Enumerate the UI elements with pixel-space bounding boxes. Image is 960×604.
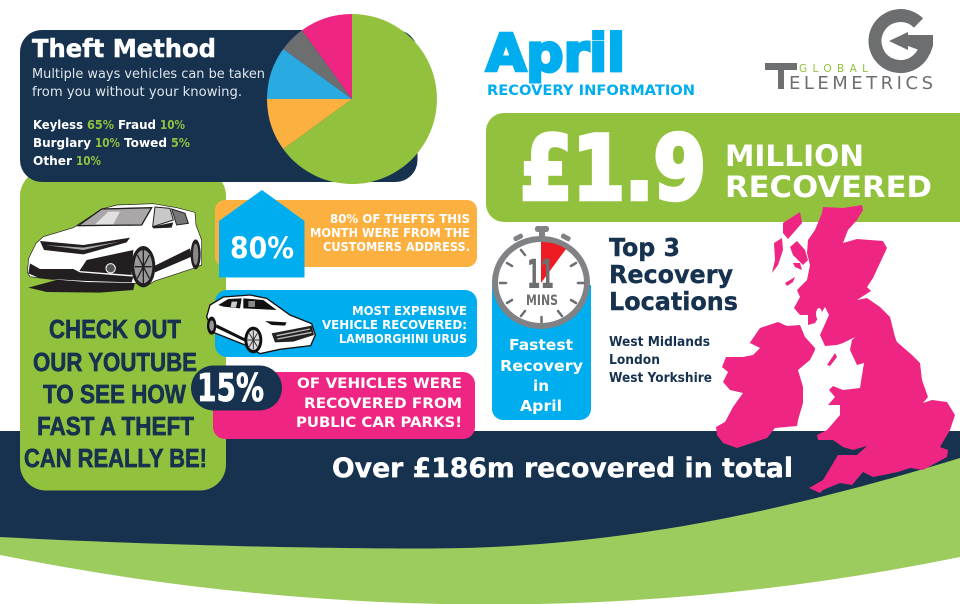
method percentages: Keyless xyxy=(33,117,83,132)
car park text: PUBLIC CAR PARKS! xyxy=(296,415,462,431)
panel: £1.9 million recovered xyxy=(486,113,960,222)
list: recovery locations: London xyxy=(609,353,660,368)
logo T xyxy=(765,63,797,89)
map: UK and Ireland xyxy=(716,205,955,493)
method percentages: 10% xyxy=(95,135,120,150)
YouTube message text: OUR YOUTUBE xyxy=(33,347,197,377)
YouTube message text: CHECK OUT xyxy=(49,314,181,344)
icon: white SUV xyxy=(207,295,315,354)
method percentages: 10% xyxy=(76,153,101,168)
list: recovery locations: West Yorkshire xyxy=(609,371,712,386)
icon: blue house with 80%: 80% xyxy=(230,231,294,265)
description: Multiple ways vehicles can be taken xyxy=(32,67,265,82)
bottom light green wave xyxy=(0,450,960,604)
list: recovery locations xyxy=(609,335,712,386)
icon: stopwatch 11 mins xyxy=(495,226,587,326)
heading: top 3 recovery locations: Locations xyxy=(609,287,738,316)
list: recovery locations: West Midlands xyxy=(609,335,710,350)
navy band xyxy=(0,431,960,549)
fastest recovery label: Fastest xyxy=(509,336,574,354)
vehicle text: LAMBORGHINI URUS xyxy=(339,332,467,346)
description xyxy=(32,67,265,100)
car park text xyxy=(296,376,462,431)
subheading: recovery information: RECOVERY INFORMATION xyxy=(487,83,695,99)
panel: thefts from customer address xyxy=(215,190,477,278)
icon: blue house with 80% xyxy=(219,190,304,278)
heading: April: April xyxy=(486,24,625,84)
panel: YouTube call to action xyxy=(20,170,226,490)
method percentages xyxy=(33,117,190,168)
method percentages: 5% xyxy=(171,135,190,150)
icon: stopwatch 11 mins: 11 xyxy=(527,252,554,298)
method percentages: 65% xyxy=(87,117,114,132)
logo GLOBAL: GLOBAL xyxy=(799,63,868,75)
fastest recovery label xyxy=(500,336,583,415)
method percentages: Burglary xyxy=(33,135,91,150)
car park text: OF VEHICLES WERE xyxy=(297,376,462,392)
method percentages: 10% xyxy=(160,117,185,132)
address statistic text xyxy=(310,212,470,254)
method percentages: Towed xyxy=(124,135,167,150)
logo wordmark: ELEMETRICS xyxy=(789,73,933,94)
million recovered label: MILLION xyxy=(725,139,864,173)
address statistic text: CUSTOMERS ADDRESS. xyxy=(323,240,470,254)
description: from you without your knowing. xyxy=(32,85,242,100)
method percentages: Fraud xyxy=(118,117,156,132)
address statistic text: MONTH WERE FROM THE xyxy=(310,226,470,240)
YouTube message text: TO SEE HOW xyxy=(43,379,186,409)
panel: most expensive vehicle xyxy=(215,290,477,357)
logo: Global Telemetrics xyxy=(765,16,933,94)
panel: public car parks xyxy=(213,372,475,439)
address statistic text: 80% OF THEFTS THIS xyxy=(330,212,470,226)
fastest recovery label: Recovery xyxy=(500,357,583,375)
vehicle text: VEHICLE RECOVERED: xyxy=(322,318,467,332)
YouTube message text xyxy=(24,314,207,473)
heading: top 3 recovery locations: Recovery xyxy=(609,260,733,289)
YouTube message text: FAST A THEFT xyxy=(37,411,194,441)
total recovered text: Over £186m recovered in total xyxy=(332,453,793,484)
logo arrow xyxy=(889,32,933,54)
logo G ring xyxy=(875,16,926,67)
million recovered label xyxy=(725,139,932,204)
heading: Theft Method: Theft Method xyxy=(32,34,216,63)
vehicle text xyxy=(322,304,467,346)
fastest recovery label: in xyxy=(533,377,549,395)
icon: stopwatch 11 mins: MINS xyxy=(526,293,558,309)
pie chart: theft methods xyxy=(267,14,437,184)
YouTube message text: CAN REALLY BE! xyxy=(24,443,207,473)
method percentages: Other xyxy=(33,153,73,168)
fastest recovery label: April xyxy=(520,397,562,415)
car park text: RECOVERED FROM xyxy=(304,396,462,412)
vehicle text: MOST EXPENSIVE xyxy=(352,304,467,318)
heading: top 3 recovery locations: Top 3 xyxy=(609,233,680,262)
big figure: £1.9 xyxy=(520,117,706,220)
panel: fastest recovery xyxy=(492,285,591,420)
heading: top 3 recovery locations xyxy=(609,233,738,316)
million recovered label: RECOVERED xyxy=(725,170,932,204)
panel: theft method xyxy=(20,30,418,182)
badge: 15%: 15% xyxy=(197,366,264,410)
icon: white hatchback car xyxy=(27,204,202,293)
